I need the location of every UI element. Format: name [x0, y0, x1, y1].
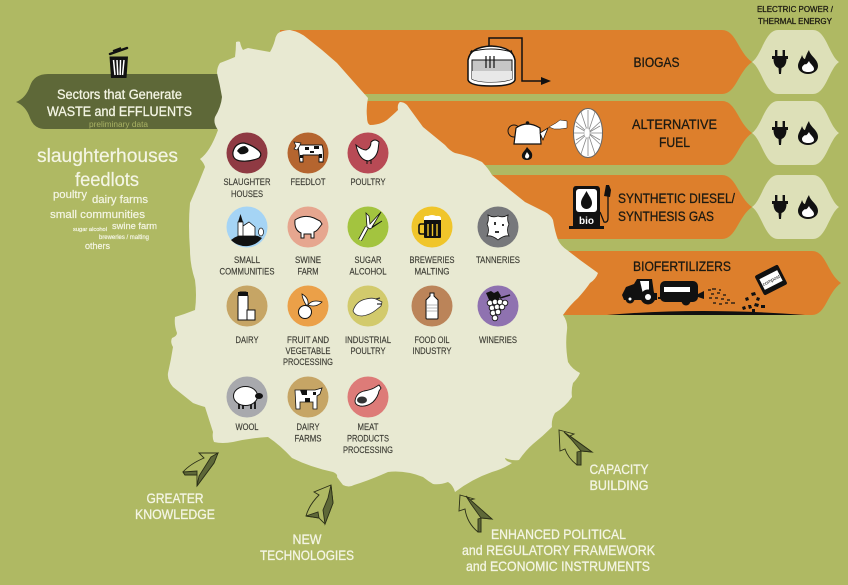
sector: meat products processing: PRODUCTS: [347, 434, 389, 444]
word cloud: sectors: [37, 146, 178, 251]
label: enhanced framework: and ECONOMIC INSTRUMENTS: [466, 558, 650, 574]
sector: dairy farms: DAIRY: [296, 422, 320, 433]
energy panel: biogas: [752, 30, 839, 94]
word cloud: sectors: dairy farms: [92, 194, 149, 206]
word cloud: sectors: swine farm: [112, 221, 157, 231]
icon: biogas digester: [468, 38, 551, 86]
sector: wineries: [478, 286, 518, 346]
icon: spreading dots and fertilizer bag: [708, 264, 788, 312]
icon: turbine wheel: [574, 108, 602, 158]
sector: poultry: [348, 132, 388, 188]
label: capacity building: [590, 461, 649, 493]
sector: sugar alcohol: [348, 206, 388, 278]
panel: alternative fuel bar: [340, 101, 752, 165]
sector: poultry: POULTRY: [350, 177, 386, 188]
sector: sugar alcohol: ALCOHOL: [350, 266, 386, 278]
word cloud: sectors: breweries / malting: [99, 235, 149, 241]
panel: synthetic diesel bar: SYNTHETIC DIESEL/: [618, 191, 735, 206]
sector: fruit and vegetable processing: FRUIT AND: [287, 335, 329, 346]
sector: industrial poultry: [345, 286, 391, 357]
word cloud: sectors: others: [85, 241, 110, 251]
sector: wineries: WINERIES: [479, 335, 517, 346]
banner: sectors that generate waste: WASTE and EFFLUENTS: [47, 103, 192, 119]
map of Uruguay: [168, 30, 598, 492]
label: new technologies: [260, 531, 354, 563]
label: enhanced framework: [462, 526, 656, 574]
sector: food oil industry: FOOD OIL: [414, 335, 450, 346]
sector: small communities: COMMUNITIES: [220, 266, 274, 278]
sector: sugar alcohol: SUGAR: [354, 255, 382, 266]
sector: breweries malting: MALTING: [414, 266, 450, 278]
panel: synthetic diesel bar: SYNTHESIS GAS: [618, 209, 714, 224]
energy panel: synthetic diesel: [752, 175, 839, 239]
sector: industrial poultry: INDUSTRIAL: [345, 335, 391, 346]
panel: alternative fuel bar: FUEL: [659, 135, 690, 150]
sector: dairy farms: FARMS: [294, 434, 322, 444]
label: greater knowledge: GREATER: [146, 490, 204, 506]
sector: dairy farms: [288, 376, 328, 444]
sector: swine farm: SWINE: [295, 255, 321, 266]
arrow: enhanced framework: [459, 495, 492, 532]
sector: wool: [226, 376, 268, 433]
panel: biogas bar: BIOGAS: [634, 55, 680, 70]
sector: swine farm: FARM: [298, 266, 319, 278]
panel: biofertilizers bar: [540, 251, 841, 315]
arrow: capacity building: [559, 430, 592, 465]
sector: fruit and vegetable processing: VEGETABLE: [286, 346, 330, 357]
word cloud: sectors: poultry: [53, 189, 87, 201]
label: greater knowledge: [135, 490, 215, 522]
sector: dairy: DAIRY: [236, 335, 259, 346]
sector: food oil industry: [412, 286, 452, 357]
sector: slaughter houses: HOUSES: [231, 189, 263, 200]
sector: meat products processing: PROCESSING: [343, 445, 393, 456]
banner: sectors that generate waste: [16, 74, 230, 129]
energy panel heading: [757, 4, 834, 26]
energy panel: alternative fuel: [752, 101, 839, 165]
sector: slaughter houses: [224, 132, 271, 200]
icon: bio fuel pump: [569, 185, 611, 229]
sector: tanneries: [476, 206, 520, 266]
sector: swine farm: [288, 206, 328, 278]
sector: feedlot: [288, 132, 328, 188]
arrow: greater knowledge: [183, 453, 218, 486]
label: new technologies: NEW: [292, 531, 322, 547]
ground shadow: [607, 311, 805, 315]
icon: tractor with spreader: [622, 279, 704, 306]
label: new technologies: TECHNOLOGIES: [260, 547, 354, 563]
sector: small communities: [220, 206, 274, 278]
icon: trash bin: [110, 48, 128, 78]
panel: alternative fuel bar: ALTERNATIVE: [632, 117, 717, 132]
sector: feedlot: FEEDLOT: [290, 177, 326, 188]
label: greater knowledge: KNOWLEDGE: [135, 506, 215, 522]
icon: spreading dots and fertilizer bag: compost: [762, 274, 782, 288]
banner: sectors that generate waste: Sectors that Generate: [57, 87, 182, 102]
sector: wool: WOOL: [236, 422, 258, 433]
label: enhanced framework: ENHANCED POLITICAL: [491, 526, 626, 542]
word cloud: sectors: slaughterhouses: [37, 146, 178, 167]
sector: breweries malting: BREWERIES: [410, 255, 454, 266]
sector: fruit and vegetable processing: PROCESSING: [283, 357, 333, 368]
sector: small communities: SMALL: [234, 255, 260, 266]
sector: meat products processing: MEAT: [358, 422, 379, 433]
icon: bio fuel pump: bio: [579, 216, 594, 227]
label: capacity building: BUILDING: [590, 477, 648, 493]
sector: industrial poultry: POULTRY: [350, 346, 386, 357]
sector: slaughter houses: SLAUGHTER: [224, 177, 271, 188]
icon: kettle on flame: [508, 120, 567, 160]
word cloud: sectors: feedlots: [75, 170, 139, 191]
arrow: new technologies: [306, 485, 333, 524]
panel: biogas bar: [280, 30, 752, 94]
word cloud: sectors: sugar alcohol: [73, 227, 107, 233]
energy panel heading: THERMAL ENERGY: [758, 16, 832, 26]
sector: fruit and vegetable processing: [283, 286, 333, 368]
word cloud: sectors: small communities: [50, 209, 146, 221]
sector: meat products processing: [343, 376, 393, 456]
energy panel heading: ELECTRIC POWER /: [757, 4, 834, 14]
label: capacity building: CAPACITY: [590, 461, 649, 477]
sector: breweries malting: [410, 206, 454, 278]
sector: food oil industry: INDUSTRY: [412, 346, 452, 357]
sector: dairy: [226, 286, 268, 346]
panel: synthetic diesel bar: [470, 175, 752, 239]
banner: sectors that generate waste: preliminary data: [89, 120, 149, 129]
label: enhanced framework: and REGULATORY FRAMEWORK: [462, 542, 656, 558]
sector: tanneries: TANNERIES: [476, 255, 520, 266]
panel: biofertilizers bar: BIOFERTILIZERS: [633, 259, 731, 274]
